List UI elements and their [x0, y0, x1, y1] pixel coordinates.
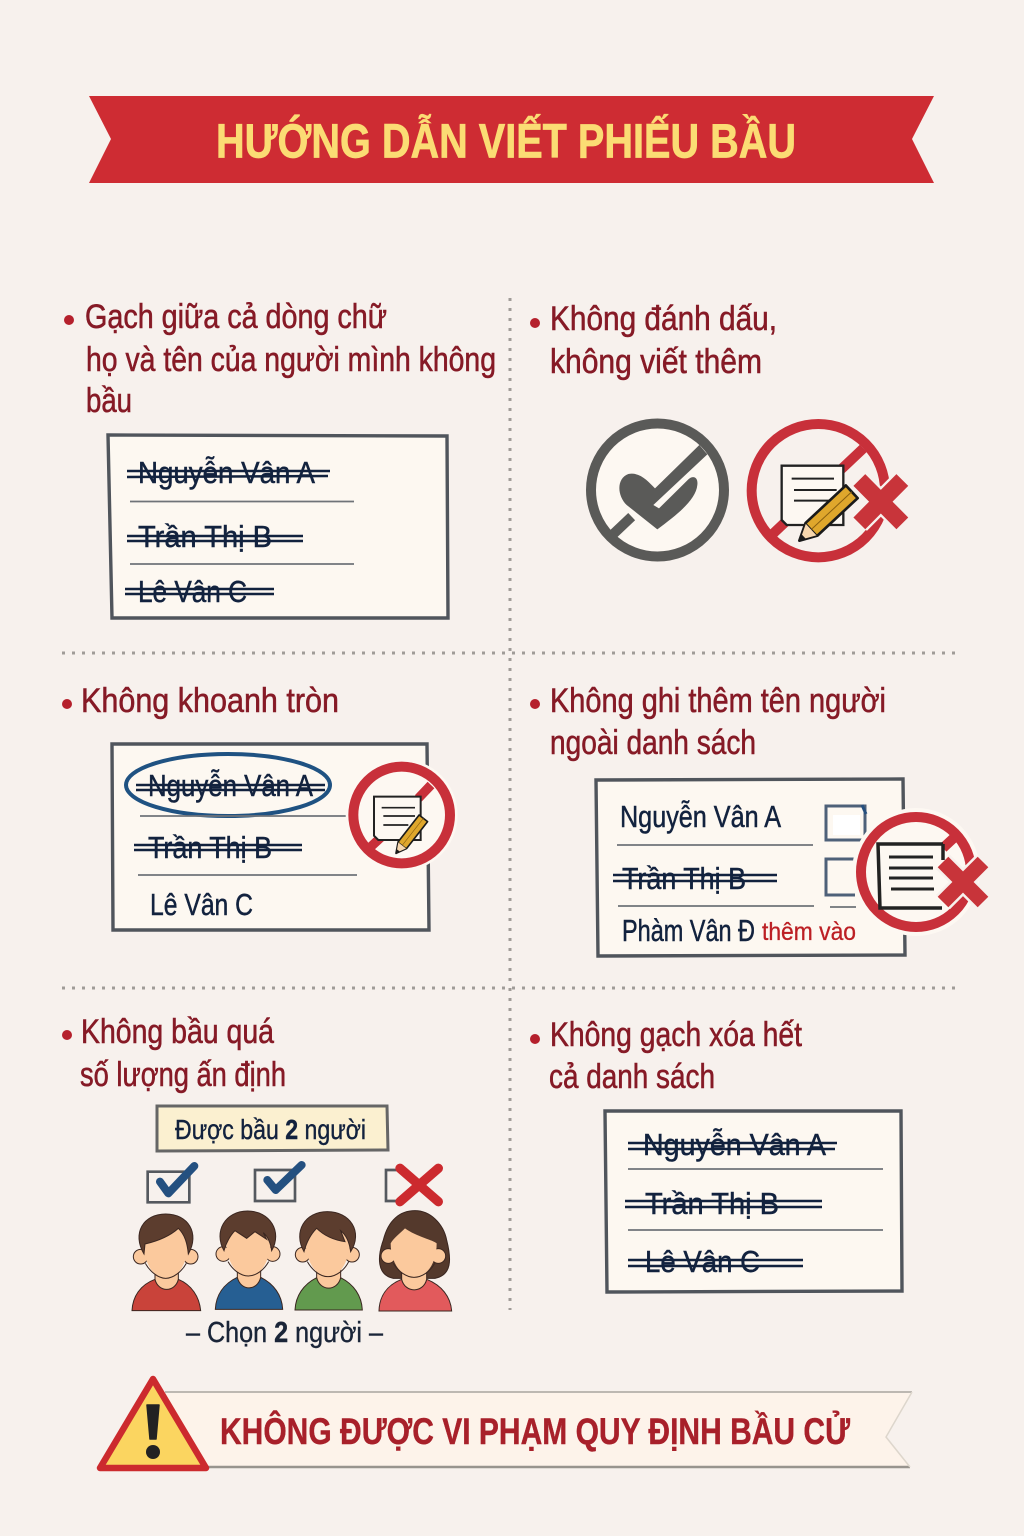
callout: allowed two people — [157, 1106, 388, 1151]
caption: choose two people: – Chọn 2 người – — [186, 1317, 384, 1349]
panel: do not circle — [62, 682, 458, 930]
ballot: added name: Trần Thị B — [622, 861, 746, 896]
icon: prohibited list — [852, 808, 983, 936]
ballot: whole list struck: Nguyễn Vân A — [643, 1127, 826, 1162]
heading: do not cross out everything — [530, 1016, 802, 1096]
footer warning ribbon: KHÔNG ĐƯỢC VI PHẠM QUY ĐỊNH BẦU CỬ — [220, 1410, 850, 1452]
title banner: HƯỚNG DẪN VIẾT PHIẾU BẦU — [216, 114, 796, 168]
heading: do not cross out everything: cả danh sách — [549, 1058, 715, 1096]
ballot: circled name — [112, 744, 429, 930]
icon: four voters — [132, 1211, 452, 1311]
voter 1 — [132, 1214, 201, 1311]
heading: strike through: bầu — [86, 382, 132, 420]
icon: ticked and crossed boxes — [148, 1165, 438, 1202]
panel: no marks or extra writing — [530, 300, 902, 557]
ballot: all struck names: Nguyễn Vân A — [138, 455, 315, 490]
panel: do not add names — [530, 682, 983, 956]
ballot: whole list struck: Trần Thị B — [645, 1186, 779, 1221]
heading: strike through — [64, 298, 496, 420]
title banner — [89, 96, 934, 183]
icon: prohibited check mark — [591, 424, 724, 556]
ballot: added name: thêm vào — [762, 918, 856, 946]
panel: strike through the whole name — [64, 298, 496, 618]
icon: warning triangle — [100, 1379, 206, 1468]
voter 2 — [215, 1211, 283, 1309]
icon: prohibited note and pencil — [752, 424, 902, 557]
voter 4 — [379, 1211, 452, 1311]
ballot: added name — [596, 779, 905, 956]
ballot: all struck names: Trần Thị B — [138, 519, 272, 554]
ballot: circled name: Nguyễn Vân A — [148, 768, 313, 803]
ballot: added name: Phàm Vân Đ — [622, 913, 755, 948]
heading: do not exceed the quota: Không bầu quá — [81, 1013, 274, 1051]
ballot: all struck names — [108, 435, 448, 618]
ballot: added name: Nguyễn Vân A — [620, 799, 781, 834]
heading: do not exceed the quota — [62, 1013, 286, 1094]
ballot: circled name: Trần Thị B — [148, 830, 272, 865]
icon: prohibited note and pencil — [346, 759, 458, 871]
ballot: whole list struck: Lê Vân C — [645, 1244, 760, 1279]
heading: do not add names: ngoài danh sách — [550, 724, 756, 762]
heading: strike through: họ và tên của người mình không — [86, 341, 496, 379]
voter 3 — [295, 1212, 362, 1310]
heading: no marks: không viết thêm — [550, 343, 762, 381]
panel: do not cross out everything — [530, 1016, 902, 1292]
ballot: circled name: Lê Vân C — [150, 887, 253, 922]
heading: do not add names — [530, 682, 886, 762]
panel: do not exceed the quota — [62, 1013, 452, 1349]
heading: do not circle: Không khoanh tròn — [81, 682, 339, 720]
heading: no marks: Không đánh dấu, — [550, 300, 777, 338]
heading: no marks — [530, 300, 777, 381]
ballot: whole list struck — [605, 1111, 902, 1292]
heading: do not cross out everything: Không gạch xóa hết — [550, 1016, 802, 1054]
ballot: all struck names: Lê Vân C — [138, 574, 247, 609]
heading: do not add names: Không ghi thêm tên người — [550, 682, 886, 720]
heading: strike through: Gạch giữa cả dòng chữ — [85, 298, 387, 336]
heading: do not exceed the quota: số lượng ấn định — [80, 1056, 286, 1094]
callout: allowed two people: Được bầu 2 người — [175, 1114, 366, 1145]
footer warning ribbon — [165, 1392, 912, 1467]
